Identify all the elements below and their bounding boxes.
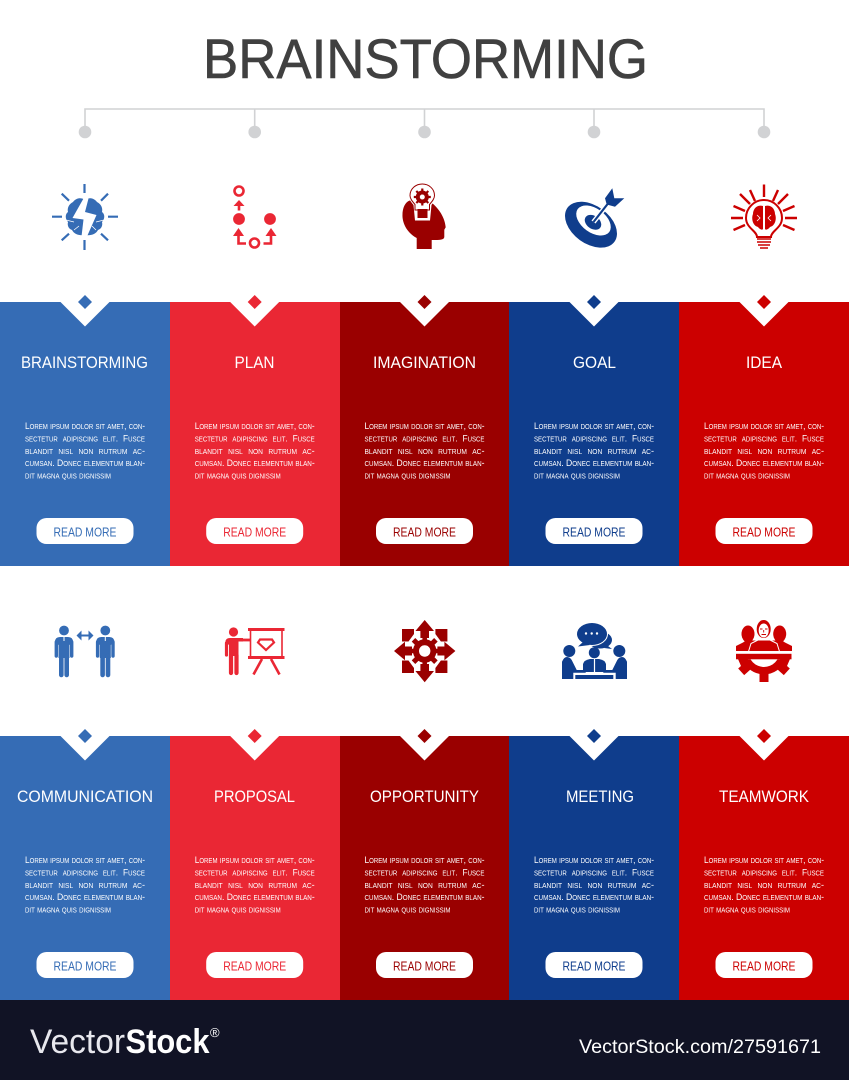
body text: blandit nisl non rutrum ac- [534,446,654,457]
body text: blandit nisl non rutrum ac- [704,446,824,457]
icon: team over gear [736,620,792,682]
body text: cumsan. Donec elementum blan- [195,458,315,469]
icon: plan steps [233,186,276,248]
button [206,518,303,544]
title: BRAINSTORMING [203,27,648,90]
body text: blandit nisl non rutrum ac- [364,880,484,891]
footer logo [30,1023,220,1061]
button [546,518,642,544]
body text: Lorem ipsum dolor sit amet, con- [364,421,484,432]
body text: dit magna quis dignissim [195,904,281,916]
body text [195,421,315,482]
heading: PROPOSAL [214,787,295,806]
body text: dit magna quis dignissim [704,470,790,482]
panel: brainstorming [0,295,170,566]
body text: dit magna quis dignissim [25,470,111,482]
body text: Lorem ipsum dolor sit amet, con- [25,421,145,432]
body text [704,421,824,482]
body text: sectetur adipiscing elit. Fusce [704,868,824,878]
notch marker [740,295,788,326]
heading: BRAINSTORMING [21,353,148,372]
body text [534,421,654,482]
body text: cumsan. Donec elementum blan- [364,458,484,469]
connector tree [79,109,770,138]
button: READ MORE [562,960,626,974]
body text: Lorem ipsum dolor sit amet, con- [704,421,824,432]
icon: target with arrow [556,188,626,257]
body text: dit magna quis dignissim [364,904,451,916]
body text [364,421,485,482]
body text: Lorem ipsum dolor sit amet, con- [534,855,654,866]
heading: OPPORTUNITY [370,787,479,806]
panel: imagination [340,295,509,566]
button [716,518,812,544]
notch marker [570,729,618,760]
body text: Lorem ipsum dolor sit amet, con- [195,855,315,866]
body text: blandit nisl non rutrum ac- [704,880,824,891]
footer logo: Vector [30,1023,125,1061]
body text: cumsan. Donec elementum blan- [704,892,824,903]
body text: cumsan. Donec elementum blan- [25,458,145,469]
body text: Lorem ipsum dolor sit amet, con- [364,855,484,866]
heading: IMAGINATION [373,353,476,372]
button: READ MORE [54,526,116,540]
icon: gear with outward arrows [394,620,455,682]
notch marker [60,729,110,760]
footer logo: ® [210,1025,220,1040]
body text: dit magna quis dignissim [195,470,281,482]
body text: Lorem ipsum dolor sit amet, con- [534,421,654,432]
button: READ MORE [223,526,286,540]
notch marker [400,295,449,326]
icon: presenter with board [226,627,284,674]
footer logo: Stock [126,1023,210,1061]
button [376,952,473,978]
body text [25,855,145,916]
body text: blandit nisl non rutrum ac- [25,446,145,457]
icon: meeting around table [562,622,627,679]
body text: sectetur adipiscing elit. Fusce [534,434,654,444]
button [716,952,812,978]
icon: bulb with brain [731,184,797,248]
body text [25,421,145,482]
heading: IDEA [746,353,783,372]
button: READ MORE [393,526,456,540]
body text: Lorem ipsum dolor sit amet, con- [25,855,145,866]
body text: sectetur adipiscing elit. Fusce [25,434,145,444]
heading: PLAN [234,353,274,372]
heading: TEAMWORK [719,787,810,806]
notch marker [570,295,618,326]
body text: sectetur adipiscing elit. Fusce [364,868,485,878]
button: READ MORE [393,960,456,974]
heading: COMMUNICATION [17,787,153,806]
body text: blandit nisl non rutrum ac- [195,880,315,891]
body text [195,855,315,916]
button: READ MORE [732,526,796,540]
body text: sectetur adipiscing elit. Fusce [534,868,654,878]
button [36,952,134,978]
footer image id: VectorStock.com/27591671 [579,1037,821,1058]
body text: blandit nisl non rutrum ac- [25,880,145,891]
body text: cumsan. Donec elementum blan- [704,458,824,469]
body text [704,855,824,916]
body text: blandit nisl non rutrum ac- [195,446,315,457]
body text: dit magna quis dignissim [534,904,620,916]
button [206,952,303,978]
button: READ MORE [54,960,116,974]
body text: sectetur adipiscing elit. Fusce [195,868,315,878]
button [36,518,134,544]
body text [534,855,654,916]
body text: sectetur adipiscing elit. Fusce [195,434,315,444]
button: READ MORE [223,960,286,974]
panel: opportunity [340,729,509,1000]
body text: dit magna quis dignissim [534,470,620,482]
body text: cumsan. Donec elementum blan- [25,892,145,903]
body text: cumsan. Donec elementum blan- [534,892,654,903]
button: READ MORE [732,960,796,974]
panel: proposal [170,729,340,1000]
button: READ MORE [562,526,626,540]
button [376,518,473,544]
body text: sectetur adipiscing elit. Fusce [364,434,485,444]
body text: Lorem ipsum dolor sit amet, con- [195,421,315,432]
body text: blandit nisl non rutrum ac- [364,446,484,457]
panel: goal [509,295,679,566]
panel: meeting [509,729,679,1000]
icon: head with bulb and gear [402,182,446,249]
body text: blandit nisl non rutrum ac- [534,880,654,891]
panel: plan [170,295,340,566]
notch marker [230,295,279,326]
body text: cumsan. Donec elementum blan- [364,892,484,903]
heading: MEETING [566,787,634,806]
footer bar [0,1000,849,1080]
notch marker [230,729,279,760]
panel: communication [0,729,170,1000]
body text: dit magna quis dignissim [364,470,451,482]
notch marker [400,729,449,760]
icon: two people communicating [55,626,114,675]
icon: brain with lightning [52,184,118,250]
notch marker [60,295,110,326]
heading: GOAL [573,353,616,372]
body text [364,855,485,916]
panel: teamwork [679,729,849,1000]
body text: cumsan. Donec elementum blan- [534,458,654,469]
body text: dit magna quis dignissim [704,904,790,916]
notch marker [740,729,788,760]
body text: dit magna quis dignissim [25,904,111,916]
button [546,952,642,978]
body text: sectetur adipiscing elit. Fusce [704,434,824,444]
body text: sectetur adipiscing elit. Fusce [25,868,145,878]
body text: cumsan. Donec elementum blan- [195,892,315,903]
body text: Lorem ipsum dolor sit amet, con- [704,855,824,866]
panel: idea [679,295,849,566]
